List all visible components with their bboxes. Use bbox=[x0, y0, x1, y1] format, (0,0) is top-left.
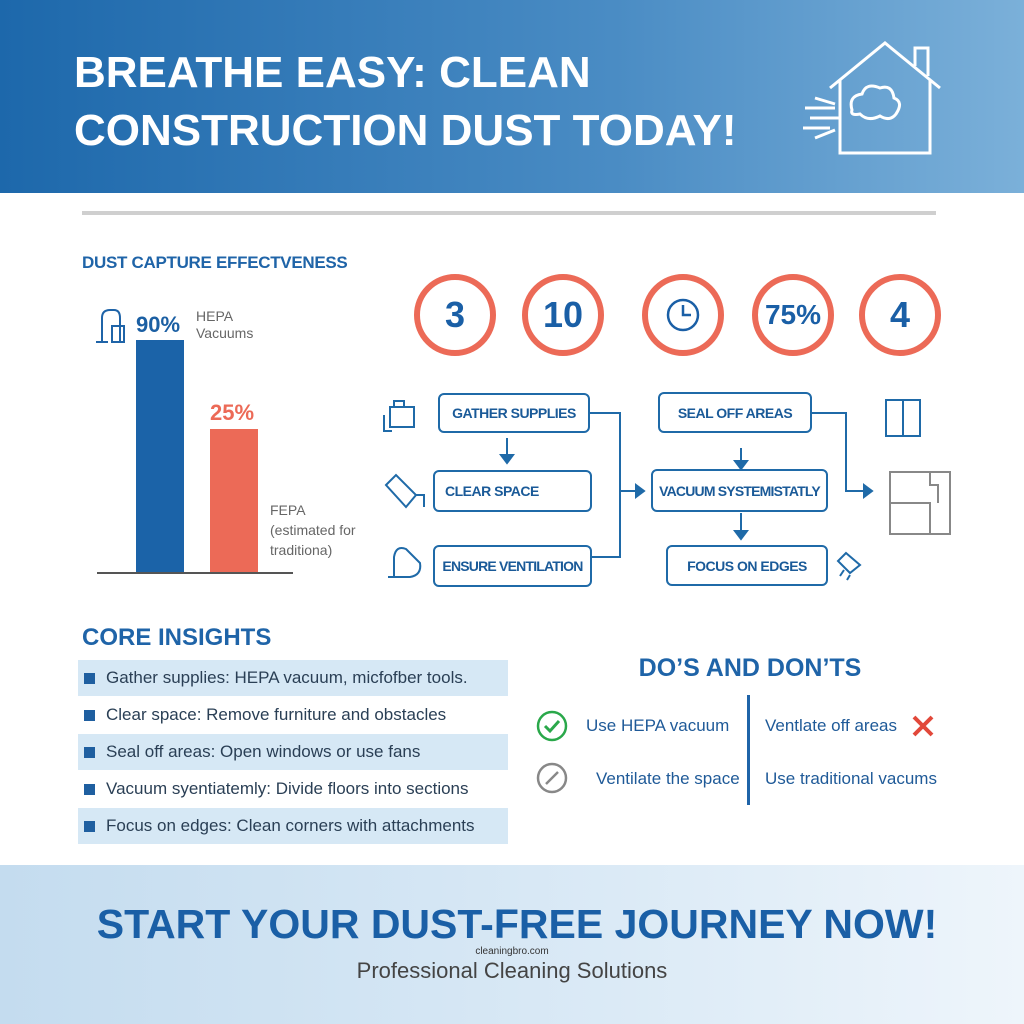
insights list: Seal off areas: Open windows or use fans bbox=[106, 742, 420, 761]
stat circles: 4 bbox=[890, 294, 910, 335]
bar chart: (estimated for bbox=[270, 522, 356, 538]
bar chart: traditiona) bbox=[270, 542, 332, 558]
bar chart: 90% bbox=[136, 312, 180, 337]
insights list bbox=[78, 660, 508, 844]
bar chart bbox=[96, 308, 356, 574]
bar chart: Vacuums bbox=[196, 325, 253, 341]
dos and donts: Ventlate off areas bbox=[765, 716, 897, 735]
footer band: START YOUR DUST-FREE JOURNEY NOW! bbox=[97, 901, 937, 947]
stat circles: 3 bbox=[445, 294, 465, 335]
stat circles: 10 bbox=[543, 294, 583, 335]
stat circles bbox=[414, 274, 941, 356]
insights list: Vacuum syentiatemly: Divide floors into sections bbox=[106, 779, 469, 798]
icon: vacuum bbox=[96, 309, 125, 343]
chart heading: DUST CAPTURE EFFECTVENESS bbox=[82, 253, 347, 272]
bar chart: FEPA bbox=[270, 502, 306, 518]
dos and donts: DO’S AND DON’TS bbox=[639, 654, 861, 682]
core insights heading: CORE INSIGHTS bbox=[82, 624, 271, 651]
footer band: Professional Cleaning Solutions bbox=[357, 958, 667, 983]
insights list: Clear space: Remove furniture and obstacles bbox=[106, 705, 446, 724]
bar chart: HEPA bbox=[196, 308, 233, 324]
insights list: Focus on edges: Clean corners with attachments bbox=[106, 816, 475, 835]
insights list: Gather supplies: HEPA vacuum, micfofber tools. bbox=[106, 668, 468, 687]
dos and donts: Ventilate the space bbox=[596, 769, 740, 788]
flowchart: VACUUM SYSTEMISTATLY bbox=[659, 482, 820, 498]
flowchart bbox=[383, 392, 951, 587]
flowchart: CLEAR SPACE bbox=[445, 483, 539, 499]
flowchart: SEAL OFF AREAS bbox=[678, 404, 792, 420]
icon: house with dust bbox=[803, 41, 941, 154]
title: BREATHE EASY: CLEAN bbox=[74, 48, 591, 97]
flowchart: GATHER SUPPLIES bbox=[452, 405, 576, 421]
dos and donts bbox=[536, 654, 937, 805]
footer band: cleaningbro.com bbox=[475, 946, 549, 957]
stat circles: 75% bbox=[765, 299, 821, 330]
title: CONSTRUCTION DUST TODAY! bbox=[74, 106, 736, 155]
bar chart: 25% bbox=[210, 400, 254, 425]
dos and donts: Use HEPA vacuum bbox=[586, 716, 729, 735]
flowchart: ENSURE VENTILATION bbox=[442, 558, 583, 574]
title bbox=[74, 48, 736, 155]
flowchart: FOCUS ON EDGES bbox=[687, 558, 807, 574]
footer band bbox=[0, 865, 1024, 1024]
header band bbox=[0, 0, 1024, 193]
dos and donts: Use traditional vacums bbox=[765, 769, 937, 788]
